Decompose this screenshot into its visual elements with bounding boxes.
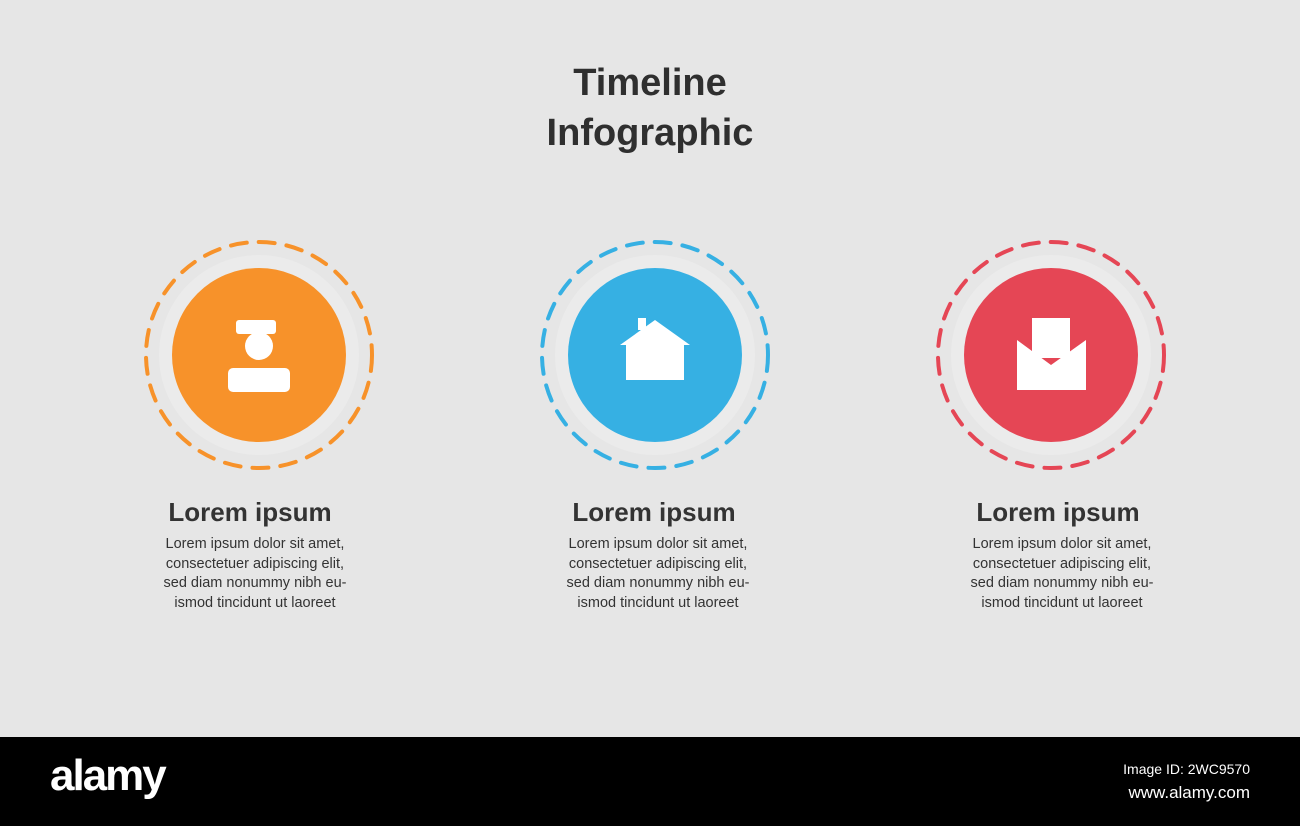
text: Lorem ipsum bbox=[976, 497, 1140, 527]
text: sed diam nonummy nibh eu- bbox=[971, 575, 1153, 591]
text: ismod tincidunt ut laoreet bbox=[577, 594, 739, 610]
text: ismod tincidunt ut laoreet bbox=[174, 594, 336, 610]
title: Timeline bbox=[573, 62, 727, 104]
icon: person bbox=[228, 320, 290, 392]
text: Lorem ipsum bbox=[572, 497, 736, 527]
footer bar: Image ID: 2WC9570 bbox=[1123, 761, 1250, 777]
text: ismod tincidunt ut laoreet bbox=[981, 594, 1143, 610]
step 3 text bbox=[971, 497, 1153, 610]
text: consectetuer adipiscing elit, bbox=[569, 556, 747, 572]
icon: house bbox=[620, 318, 690, 380]
step 2 text bbox=[567, 497, 749, 610]
text: Lorem ipsum dolor sit amet, bbox=[569, 536, 747, 552]
footer bar: alamy bbox=[50, 751, 165, 800]
title: Infographic bbox=[547, 112, 753, 154]
icon: envelope bbox=[1017, 318, 1086, 390]
text: consectetuer adipiscing elit, bbox=[166, 556, 344, 572]
title bbox=[547, 62, 753, 154]
text: Lorem ipsum dolor sit amet, bbox=[166, 536, 344, 552]
text: Lorem ipsum dolor sit amet, bbox=[973, 536, 1151, 552]
step 1 circle bbox=[146, 242, 372, 468]
step 1 text bbox=[164, 497, 346, 610]
text: Lorem ipsum bbox=[168, 497, 332, 527]
footer bar: www.alamy.com bbox=[1128, 783, 1250, 802]
text: sed diam nonummy nibh eu- bbox=[164, 575, 346, 591]
step 2 circle bbox=[542, 242, 768, 468]
text: sed diam nonummy nibh eu- bbox=[567, 575, 749, 591]
step 3 circle bbox=[938, 242, 1164, 468]
footer bar bbox=[0, 737, 1300, 826]
text: consectetuer adipiscing elit, bbox=[973, 556, 1151, 572]
